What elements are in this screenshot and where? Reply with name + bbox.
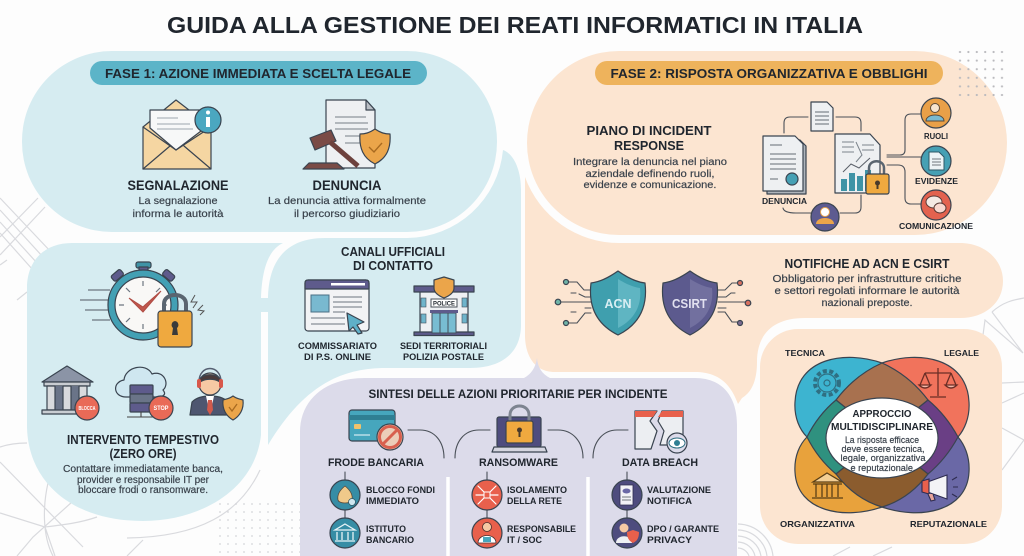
icon: envelope with info bubble: [143, 100, 221, 169]
icon: top document: [811, 102, 833, 131]
panel: sintesi delle azioni prioritarie: [300, 358, 737, 556]
action: dpo garante: PRIVACY: [647, 535, 692, 545]
icon: report with padlock: [835, 134, 889, 194]
action: blocco fondi: IMMEDIATO: [366, 496, 419, 506]
action: responsabile: [472, 518, 576, 548]
icon: bank with blocca badge: BLOCCA: [78, 406, 96, 412]
icon: scales: [919, 368, 957, 397]
labels: sedi territoriali: [400, 341, 487, 362]
column: data breach: [612, 411, 719, 548]
icon: megaphone: [922, 475, 958, 501]
icon: credit card blocked: [349, 410, 403, 450]
labels: commissariato: [298, 341, 377, 362]
action: blocco fondi: [330, 480, 435, 510]
icon: gear: [815, 371, 839, 395]
text: piano di incident response: PIANO DI INCIDENT: [586, 123, 712, 138]
text: notifiche: Obbligatorio per infrastrutture critiche: [772, 274, 962, 285]
panel: notifiche ad acn e csirt: [525, 177, 1003, 404]
text: intervento tempestivo: [63, 432, 223, 496]
text: notifiche: NOTIFICHE AD ACN E CSIRT: [784, 256, 950, 271]
icon: acn shield: ACN: [604, 296, 632, 311]
action: isolamento: [472, 480, 567, 510]
text: intervento tempestivo: provider e responsabile IT per: [77, 475, 210, 486]
labels: sedi territoriali: SEDI TERRITORIALI: [400, 341, 487, 351]
icon: broken browser with eye: [635, 411, 687, 453]
action: isolamento: DELLA RETE: [507, 496, 562, 506]
text: denuncia: [268, 178, 426, 220]
icon: acn shield: [555, 271, 646, 335]
icon and label: ruoli: RUOLI: [924, 132, 948, 141]
icon: cloud server with stop badge: STOP: [154, 406, 168, 412]
panel: fase 2 risposta organizzativa: [527, 48, 1007, 235]
text: segnalazione: La segnalazione: [138, 195, 218, 207]
label: frode bancaria: FRODE BANCARIA: [328, 457, 424, 469]
text: notifiche: [772, 256, 962, 309]
text: notifiche: e settori regolati informare le autorità: [774, 286, 960, 297]
action: valutazione: [612, 480, 711, 510]
panel: canali ufficiali di contatto: [268, 150, 521, 445]
icon: csirt shield: [662, 271, 751, 335]
heading: canali: [341, 245, 445, 273]
action: dpo garante: [612, 518, 719, 548]
heading: fase 1: FASE 1: AZIONE IMMEDIATA E SCELTA LEGALE: [105, 67, 411, 81]
action: dpo garante: DPO / GARANTE: [647, 524, 719, 534]
action: responsabile: RESPONSABILE: [507, 524, 576, 534]
text: notifiche: nazionali preposte.: [822, 298, 912, 309]
venn centre text: MULTIDISCIPLINARE: [831, 421, 933, 433]
heading: sintesi: SINTESI DELLE AZIONI PRIORITARIE PER INCIDENTE: [368, 389, 668, 401]
icon: csirt shield: CSIRT: [672, 297, 707, 311]
icon: police station: POLICE: [433, 302, 455, 308]
labels: sedi territoriali: POLIZIA POSTALE: [403, 352, 484, 362]
icon: cloud server with stop badge: [116, 367, 173, 420]
heading: canali: DI CONTATTO: [353, 259, 433, 273]
venn centre text: deve essere tecnica,: [842, 444, 924, 455]
icon: document gavel and shield: [303, 100, 390, 169]
text: intervento tempestivo: bloccare frodi o ransomware.: [78, 485, 208, 496]
icon and label: evidenze: EVIDENZE: [915, 177, 959, 186]
venn centre text: e reputazionale.: [850, 463, 916, 474]
column: frode bancaria: [328, 410, 435, 548]
panel: approccio multidisciplinare: [760, 329, 1002, 544]
labels: commissariato: DI P.S. ONLINE: [304, 352, 371, 362]
heading: canali: CANALI UFFICIALI: [341, 245, 445, 259]
venn centre text: [831, 408, 933, 474]
venn labels: LEGALE: [944, 348, 979, 358]
icon: institution: [812, 473, 843, 498]
action: valutazione: VALUTAZIONE: [647, 485, 711, 495]
label: ransomware: RANSOMWARE: [479, 457, 558, 469]
venn centre text: La risposta efficace: [845, 435, 919, 446]
venn centre text: legale, organizzativa: [840, 453, 926, 464]
icon and label: evidenze: [915, 146, 959, 186]
icon: browser with cursor: [305, 280, 369, 334]
action: istituto bancario: [330, 518, 414, 548]
panel: intervento tempestivo: [27, 243, 283, 521]
heading: fase 2: [595, 61, 943, 85]
label: data breach: DATA BREACH: [622, 457, 698, 469]
icon: police station: [414, 277, 474, 336]
icon and label: comunicazione: [899, 190, 974, 231]
text: piano di incident response: evidenze e comunicazione.: [584, 180, 716, 191]
venn centre text: APPROCCIO: [852, 408, 912, 420]
text: denuncia: DENUNCIA: [312, 178, 382, 193]
text: piano di incident response: aziendale definendo ruoli,: [586, 169, 714, 180]
icon: bank with blocca badge: [42, 366, 99, 420]
text: piano di incident response: RESPONSE: [614, 138, 684, 153]
action: istituto bancario: BANCARIO: [366, 535, 414, 545]
icon: stopwatch with padlock: [80, 262, 204, 347]
action: blocco fondi: BLOCCO FONDI: [366, 485, 435, 495]
icon: support agent with shield: [190, 368, 243, 420]
venn labels: TECNICA: [785, 348, 825, 358]
text: intervento tempestivo: Contattare immediatamente banca,: [63, 464, 223, 475]
text: segnalazione: informa le autorità: [132, 208, 224, 220]
action: isolamento: ISOLAMENTO: [507, 485, 567, 495]
title: GUIDA ALLA GESTIONE DEI REATI INFORMATICI IN ITALIA: [167, 12, 863, 38]
venn labels: REPUTAZIONALE: [910, 519, 987, 529]
heading: fase 2: FASE 2: RISPOSTA ORGANIZZATIVA E OBBLIGHI: [610, 67, 928, 81]
action: responsabile: IT / SOC: [507, 535, 542, 545]
text: intervento tempestivo: (ZERO ORE): [110, 446, 176, 461]
icon: denuncia document: [763, 136, 806, 194]
venn labels: ORGANIZZATIVA: [780, 519, 855, 529]
text: piano di incident response: Integrare la denuncia nel piano: [573, 157, 727, 168]
heading: fase 1: [90, 61, 427, 85]
text: segnalazione: SEGNALAZIONE: [128, 178, 228, 193]
text: denuncia: La denuncia attiva formalmente: [268, 195, 426, 207]
text: denuncia: il percorso giudiziario: [294, 208, 400, 220]
labels: commissariato: COMMISSARIATO: [298, 341, 377, 351]
text: piano di incident response: [573, 123, 727, 191]
icon: laptop with padlock: [492, 406, 547, 452]
panel: fase 1 azione immediata: [22, 51, 497, 232]
venn labels: [780, 348, 987, 529]
action: valutazione: NOTIFICA: [647, 496, 693, 506]
icon: person circle: [811, 203, 839, 231]
icon and label: ruoli: [921, 98, 951, 141]
icon and label: comunicazione: COMUNICAZIONE: [899, 222, 974, 231]
column: ransomware: [472, 406, 576, 548]
venn diagram: [795, 357, 969, 513]
text: segnalazione: [128, 178, 228, 220]
diagram: incident response flow: [762, 98, 974, 231]
action: istituto bancario: ISTITUTO: [366, 524, 406, 534]
label: denuncia: DENUNCIA: [762, 197, 807, 206]
text: intervento tempestivo: INTERVENTO TEMPESTIVO: [67, 432, 219, 447]
